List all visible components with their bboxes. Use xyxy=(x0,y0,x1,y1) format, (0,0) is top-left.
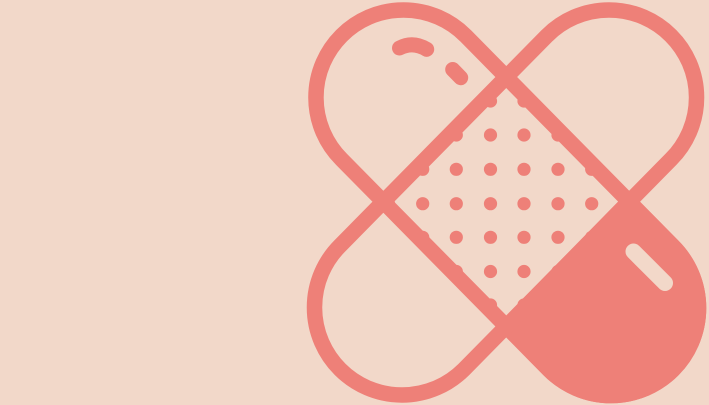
pad perforation dots xyxy=(382,94,598,312)
highlight: bottom-right pill xyxy=(634,252,665,283)
highlight: top-left arc xyxy=(400,45,427,49)
bandage strip: top-left to bottom-right xyxy=(316,10,699,396)
highlight: top-left dash xyxy=(453,70,461,78)
bandage icon group xyxy=(314,10,699,396)
bandage strip: top-right to bottom-left xyxy=(314,10,697,395)
filled bottom-right bandage tip xyxy=(506,202,699,396)
